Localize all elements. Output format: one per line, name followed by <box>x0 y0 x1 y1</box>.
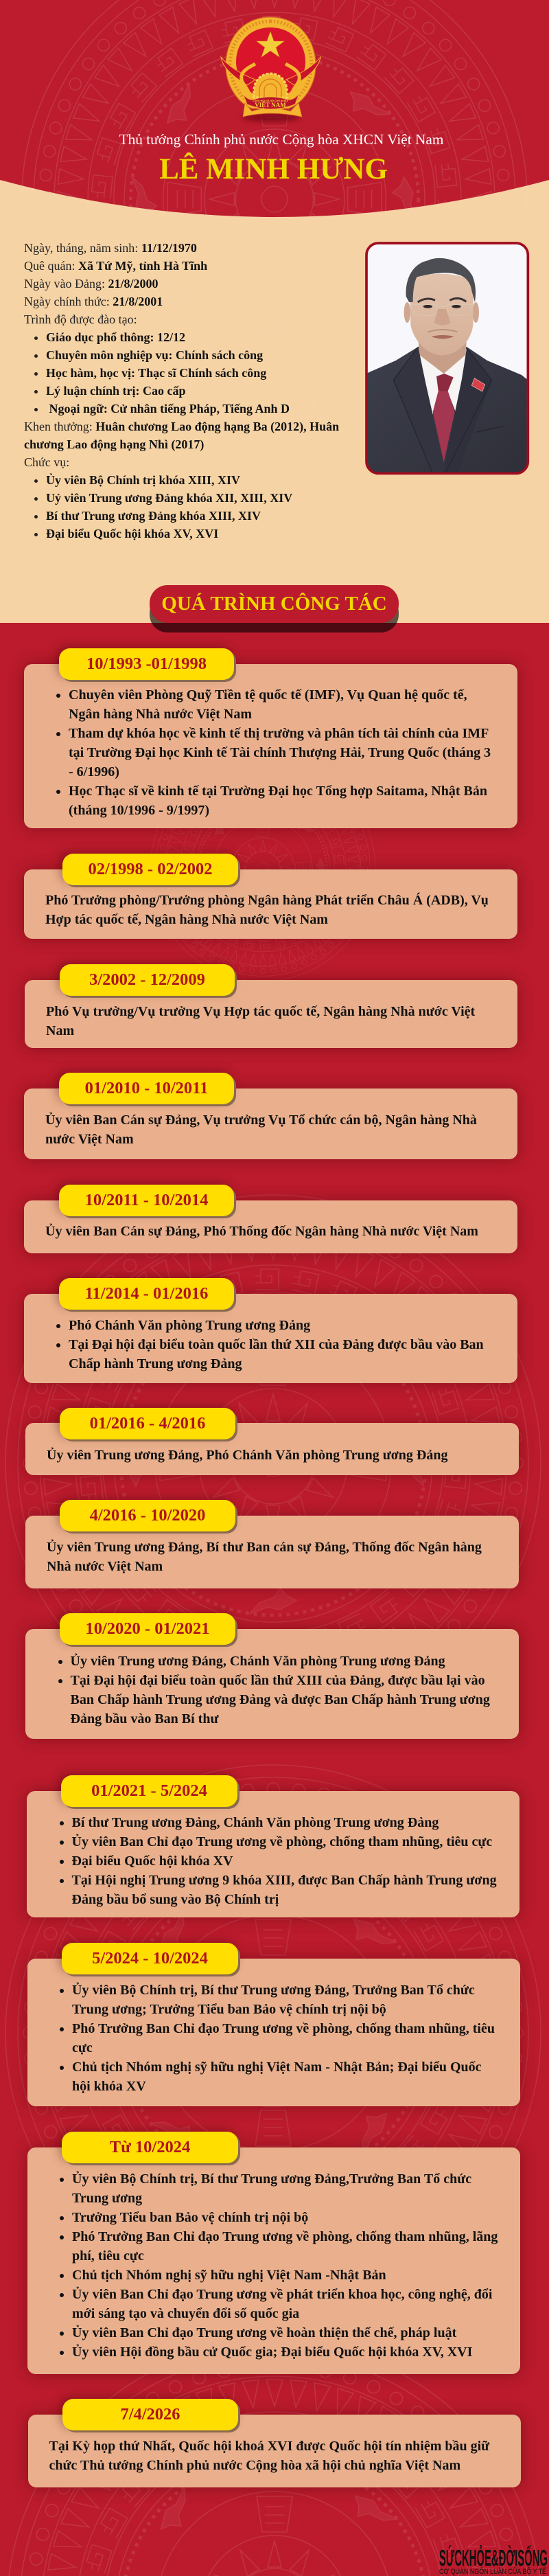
panel: 10/1993 - 01/1998 <box>16 641 524 836</box>
panel: 01/2010 - 10/2011: Ủy viên Ban Cán sự Đảng, Vụ trưởng Vụ Tổ chức cán bộ, Ngân hàng Nhà <box>45 1113 477 1128</box>
panel: 4/2016 - 10/2020: Nhà nước Việt Nam <box>47 1559 163 1574</box>
panel: 4/2016 - 10/2020 <box>18 1493 526 1596</box>
panel: 5/2024 - 10/2024: Chủ tịch Nhóm nghị sỹ hữu nghị Việt Nam - Nhật Bản; Đại biểu Quốc <box>72 2060 482 2075</box>
panel: personal information: Ủy viên Bộ Chính trị khóa XIII, XIV <box>46 473 240 487</box>
panel: personal information: Ngày, tháng, năm sinh: 11/12/1970 <box>24 241 197 255</box>
title: name: LÊ MINH HƯNG <box>159 153 388 185</box>
panel: 11/2014 - 01/2016: Chấp hành Trung ương Đảng <box>69 1356 242 1371</box>
panel: 11/2014 - 01/2016: 11/2014 - 01/2016 <box>85 1284 208 1303</box>
icon: national emblem of Vietnam: VIỆT NAM <box>255 102 286 109</box>
panel: 11/2014 - 01/2016: Tại Đại hội đại biểu toàn quốc lần thứ XII của Đảng được bầu vào Ban <box>69 1337 484 1352</box>
panel: personal information: Quê quán: Xã Tứ Mỹ, tỉnh Hà Tĩnh <box>24 259 207 273</box>
heading: work history: QUÁ TRÌNH CÔNG TÁC <box>161 593 387 615</box>
panel: 5/2024 - 10/2024: Trung ương; Trưởng Tiểu ban Bảo vệ chính trị nội bộ <box>72 2002 386 2017</box>
panel: 01/2021 - 5/2024 <box>19 1769 527 1925</box>
panel: 02/1998 - 02/2002: 02/1998 - 02/2002 <box>88 860 213 878</box>
panel: from 10/2024: mới sáng tạo và chuyển đổi số quốc gia <box>72 2306 299 2321</box>
panel: from 10/2024: Trung ương <box>72 2191 142 2206</box>
panel: from 10/2024 <box>21 2125 527 2382</box>
panel: 10/1993 - 01/1998: - 6/1996) <box>69 764 119 779</box>
panel: 10/2020 - 01/2021: 10/2020 - 01/2021 <box>85 1619 210 1638</box>
panel: from 10/2024: Ủy viên Ban Chỉ đạo Trung ương về phát triển khoa học, công nghệ, đổi <box>72 2287 492 2302</box>
panel: 01/2016 - 4/2016: Ủy viên Trung ương Đảng, Phó Chánh Văn phòng Trung ương Đảng <box>47 1448 447 1463</box>
panel: 5/2024 - 10/2024: 5/2024 - 10/2024 <box>92 1949 208 1968</box>
panel: 3/2002 - 12/2009 <box>18 957 524 1055</box>
panel: 10/2020 - 01/2021: Đảng bầu vào Ban Bí thư <box>70 1711 218 1726</box>
panel: 10/1993 - 01/1998: tại Trường Đại học Kinh tế Tài chính Thượng Hải, Trung Quốc (tháng 3 <box>69 745 491 760</box>
panel: 01/2010 - 10/2011: 01/2010 - 10/2011 <box>85 1079 208 1097</box>
panel: 02/1998 - 02/2002: Hợp tác quốc tế, Ngân hàng Nhà nước Việt Nam <box>45 912 328 927</box>
panel: 01/2010 - 10/2011: nước Việt Nam <box>45 1132 134 1147</box>
icon: national emblem of Vietnam <box>220 16 321 125</box>
panel: 5/2024 - 10/2024: cực <box>72 2040 93 2055</box>
panel: 10/2020 - 01/2021 <box>18 1607 526 1746</box>
panel: 01/2021 - 5/2024: Bí thư Trung ương Đảng, Chánh Văn phòng Trung ương Đảng <box>71 1815 439 1830</box>
panel: 02/1998 - 02/2002 <box>16 847 524 946</box>
panel: personal information: Chức vụ: <box>24 455 69 469</box>
panel: 11/2014 - 01/2016: Phó Chánh Văn phòng Trung ương Đảng <box>69 1318 310 1333</box>
panel: from 10/2024: phí, tiêu cực <box>72 2248 144 2264</box>
panel: from 10/2024: Chủ tịch Nhóm nghị sỹ hữu nghị Việt Nam -Nhật Bản <box>72 2268 386 2283</box>
panel: 10/1993 - 01/1998: Chuyên viên Phòng Quỹ Tiền tệ quốc tế (IMF), Vụ Quan hệ quốc tế, <box>69 687 467 703</box>
panel: 01/2010 - 10/2011 <box>16 1066 524 1166</box>
panel: from 10/2024: Phó Trưởng Ban Chỉ đạo Trung ương về phòng, chống tham nhũng, lãng <box>72 2229 498 2244</box>
panel: personal information <box>24 241 339 540</box>
panel: personal information: Đại biểu Quốc hội khóa XV, XVI <box>46 527 218 540</box>
panel: 3/2002 - 12/2009: Nam <box>46 1023 74 1038</box>
panel: personal information: Lý luận chính trị: Cao cấp <box>46 384 186 398</box>
panel: 5/2024 - 10/2024: Phó Trưởng Ban Chỉ đạo Trung ương về phòng, chống tham nhũng, tiêu <box>72 2021 495 2036</box>
panel: 01/2021 - 5/2024: Đảng bầu bổ sung vào Bộ Chính trị <box>71 1892 279 1907</box>
panel: personal information: Trình độ được đào tạo: Khen thưởng: Huân chương Lao động hạng Ba (2012), Huân <box>24 312 339 433</box>
panel: 01/2021 - 5/2024: Đại biểu Quốc hội khóa XV <box>71 1854 233 1869</box>
panel: personal information: Chuyên môn nghiệp vụ: Chính sách công <box>46 348 263 362</box>
panel: personal information: Giáo dục phổ thông: 12/12 <box>46 330 185 344</box>
panel: 7/4/2026: 7/4/2026 <box>120 2405 180 2424</box>
panel: 01/2016 - 4/2016 <box>18 1401 526 1483</box>
panel: 10/1993 - 01/1998: Tham dự khóa học về kinh tế thị trường và phân tích tài chính của IMF <box>69 726 489 741</box>
panel: from 10/2024: Ủy viên Bộ Chính trị, Bí thư Trung ương Đảng,Trưởng Ban Tổ chức <box>72 2172 471 2187</box>
panel: 11/2014 - 01/2016 <box>16 1272 524 1391</box>
panel: 10/1993 - 01/1998: Ngân hàng Nhà nước Việt Nam <box>69 707 252 722</box>
panel: personal information: Học hàm, học vị: Thạc sĩ Chính sách công <box>46 366 266 380</box>
panel: 10/1993 - 01/1998: Học Thạc sĩ về kinh tế tại Trường Đại học Tổng hợp Saitama, Nhật Bản <box>69 784 487 799</box>
panel: personal information: Bí thư Trung ương Đảng khóa XIII, XIV <box>46 509 261 523</box>
panel: 02/1998 - 02/2002: Phó Trưởng phòng/Trưởng phòng Ngân hàng Phát triển Châu Á (ADB), Vụ <box>45 893 489 908</box>
panel: 10/2020 - 01/2021: Ủy viên Trung ương Đảng, Chánh Văn phòng Trung ương Đảng <box>70 1654 445 1669</box>
panel: 10/2020 - 01/2021: Ban Chấp hành Trung ương Đảng và được Ban Chấp hành Trung ương <box>70 1692 490 1707</box>
panel: 01/2016 - 4/2016: 01/2016 - 4/2016 <box>90 1414 205 1433</box>
panel: 7/4/2026: Tại Kỳ họp thứ Nhất, Quốc hội khoá XVI được Quốc hội tín nhiệm bầu giữ <box>49 2439 489 2454</box>
panel: 7/4/2026: chức Thủ tướng Chính phủ nước Cộng hòa xã hội chủ nghĩa Việt Nam <box>49 2458 460 2473</box>
panel: 3/2002 - 12/2009: 3/2002 - 12/2009 <box>89 970 205 989</box>
panel: 01/2021 - 5/2024: Ủy viên Ban Chỉ đạo Trung ương về phòng, chống tham nhũng, tiêu cực <box>71 1834 492 1849</box>
panel: from 10/2024: Ủy viên Ban Chỉ đạo Trung ương về hoàn thiện thể chế, pháp luật <box>72 2325 456 2340</box>
panel: 3/2002 - 12/2009: Phó Vụ trưởng/Vụ trưởng Vụ Hợp tác quốc tế, Ngân hàng Nhà nước Việt <box>46 1004 475 1019</box>
panel: 10/1993 - 01/1998: 10/1993 -01/1998 <box>86 654 207 673</box>
panel: personal information: Ngày vào Đảng: 21/8/2000 <box>24 277 158 290</box>
subtitle: Thủ tướng Chính phủ nước Cộng hòa XHCN Việt Nam <box>119 131 443 148</box>
panel: from 10/2024: Trưởng Tiểu ban Bảo vệ chính trị nội bộ <box>72 2210 308 2225</box>
heading: work history <box>150 585 399 623</box>
panel: 01/2021 - 5/2024: 01/2021 - 5/2024 <box>91 1781 207 1800</box>
panel: 10/2020 - 01/2021: Tại Đại hội đại biểu toàn quốc lần thứ XIII của Đảng, được bầu lại vào <box>70 1673 485 1688</box>
panel: 4/2016 - 10/2020: 4/2016 - 10/2020 <box>90 1506 205 1525</box>
panel: personal information: Uỷ viên Trung ương Đảng khóa XII, XIII, XIV <box>46 491 292 505</box>
panel: 5/2024 - 10/2024: hội khóa XV <box>72 2079 146 2094</box>
panel: from 10/2024: Ủy viên Hội đồng bầu cử Quốc gia; Đại biểu Quốc hội khóa XV, XVI <box>72 2345 472 2360</box>
icon: national emblem of Vietnam: CỘNG HÒA XÃ HỘI CHỦ NGHĨA <box>253 99 288 102</box>
panel: personal information: Ngày chính thức: 21/8/2001 <box>24 295 163 308</box>
panel: personal information: Ngoại ngữ: Cử nhân tiếng Pháp, Tiếng Anh D <box>49 402 290 415</box>
panel: 01/2021 - 5/2024: Tại Hội nghị Trung ương 9 khóa XIII, được Ban Chấp hành Trung ương <box>71 1873 497 1888</box>
panel: 7/4/2026 <box>21 2393 528 2495</box>
panel: 5/2024 - 10/2024 <box>20 1937 528 2114</box>
panel: personal information: chương Lao động hạng Nhì (2017) <box>24 437 204 451</box>
panel: 10/2011 - 10/2014 <box>16 1178 524 1261</box>
panel: 10/2011 - 10/2014: Ủy viên Ban Cán sự Đảng, Phó Thống đốc Ngân hàng Nhà nước Việt Nam <box>45 1224 478 1239</box>
panel: 10/2011 - 10/2014: 10/2011 - 10/2014 <box>85 1191 208 1209</box>
panel: 4/2016 - 10/2020: Ủy viên Trung ương Đảng, Bí thư Ban cán sự Đảng, Thống đốc Ngân hàng <box>47 1540 482 1555</box>
panel: 5/2024 - 10/2024: Ủy viên Bộ Chính trị, Bí thư Trung ương Đảng, Trưởng Ban Tổ chức <box>72 1983 475 1998</box>
portrait photo <box>365 242 530 475</box>
panel: 10/1993 - 01/1998: (tháng 10/1996 - 9/1997) <box>69 803 209 818</box>
panel: from 10/2024: Từ 10/2024 <box>110 2138 190 2156</box>
